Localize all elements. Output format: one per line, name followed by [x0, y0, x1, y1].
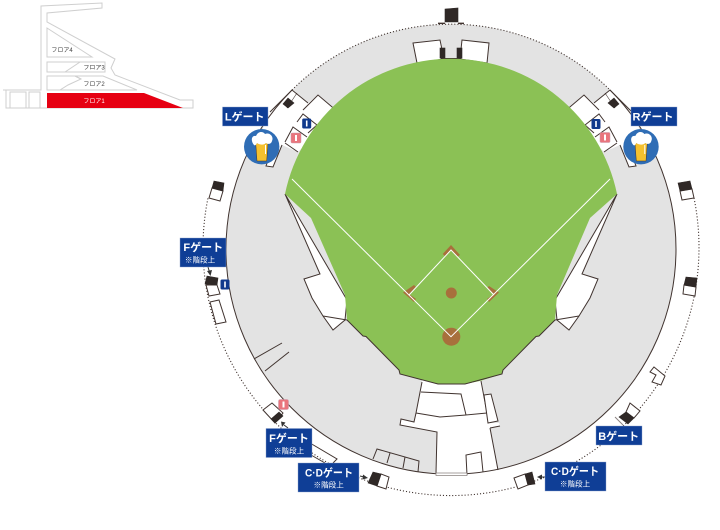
- foul and base lines: [292, 179, 610, 337]
- label: L gate: [222, 107, 268, 126]
- gate F lower: [263, 403, 283, 423]
- floor section key: [3, 3, 193, 108]
- icon: restroom pink left: [291, 133, 301, 143]
- floor 2 label: フロア2: [83, 81, 105, 88]
- label: B gate: [596, 426, 642, 445]
- top gate: [438, 8, 464, 23]
- white area: right gate: [564, 90, 639, 167]
- seating boxes: [373, 449, 419, 472]
- gate L black: [283, 98, 294, 108]
- gate C-D right: [514, 472, 535, 489]
- beer icon right: [623, 129, 659, 164]
- label: C-D gate left: C·Dゲート: [305, 466, 353, 480]
- label: R gate: Rゲート: [633, 110, 673, 124]
- top gate stands: [413, 40, 489, 63]
- outfield lines: [254, 343, 337, 463]
- label: R gate: [631, 107, 677, 126]
- gate C-D left: [368, 472, 389, 489]
- infield: [292, 179, 610, 346]
- floor 4 label: フロア4: [51, 47, 73, 54]
- label: F gate left: [180, 238, 226, 267]
- floor 1 highlighted: [47, 93, 183, 108]
- left gate structure lines: [266, 90, 338, 167]
- white area: backstop corridor: [400, 379, 500, 476]
- icon: restroom blue left: [302, 118, 311, 128]
- pitcher mound: [446, 288, 457, 298]
- label: F gate lower: [266, 428, 312, 458]
- gate upper right: [678, 181, 694, 200]
- box below F gate: [210, 300, 226, 324]
- arrow to C-D gate right: [537, 474, 545, 480]
- floor 1 label: フロア1: [83, 98, 105, 105]
- gate upper left: [209, 181, 224, 201]
- label: F gate left: Fゲート: [183, 240, 223, 254]
- second base dirt: [443, 245, 460, 257]
- label: B gate: Bゲート: [598, 429, 639, 443]
- label: C-D gate right: ※階段上: [560, 478, 591, 488]
- gate F left: [205, 276, 220, 296]
- upper stand edge dotted: [292, 24, 610, 90]
- gate right middle: [683, 277, 697, 296]
- gate R black: [608, 98, 619, 108]
- icon: restroom blue right: [592, 119, 600, 129]
- arrow to F gate left: [207, 267, 212, 276]
- white area: left gate: [263, 90, 338, 167]
- first base dirt: [487, 286, 499, 302]
- label: C-D gate left: [298, 463, 359, 492]
- label: C-D gate right: [545, 462, 606, 491]
- label: F gate lower: Fゲート: [269, 431, 309, 445]
- gate B: [615, 403, 640, 425]
- backstop structure: [400, 381, 500, 476]
- label: C-D gate right: C·Dゲート: [551, 464, 599, 478]
- bullpen base lines: [323, 316, 579, 320]
- stadium outline: [226, 90, 676, 474]
- label: F gate left: ※階段上: [185, 254, 216, 264]
- arrow to C-D gate left: [360, 474, 368, 480]
- white area: right bullpen: [555, 194, 617, 330]
- white area: left bullpen: [285, 194, 347, 330]
- beer icon left: [244, 129, 279, 164]
- stadium concourse disc: [226, 24, 676, 474]
- floor 3 label: フロア3: [83, 64, 105, 72]
- field lower edge: [347, 320, 555, 384]
- field: [285, 59, 617, 384]
- label: C-D gate left: ※階段上: [314, 480, 344, 490]
- outer dotted walkway: [203, 198, 699, 496]
- icon: restroom blue F gate: [220, 280, 230, 290]
- arrow to F gate lower: [281, 422, 288, 428]
- right gate structure lines: [564, 90, 636, 167]
- home plate dirt: [442, 328, 460, 346]
- icon: restroom pink right: [600, 132, 610, 142]
- structure right small: [650, 367, 665, 385]
- icon: restroom pink lower: [278, 400, 288, 410]
- third base dirt: [403, 285, 416, 302]
- label: L gate: Lゲート: [225, 110, 265, 124]
- label: F gate lower: ※階段上: [274, 446, 305, 456]
